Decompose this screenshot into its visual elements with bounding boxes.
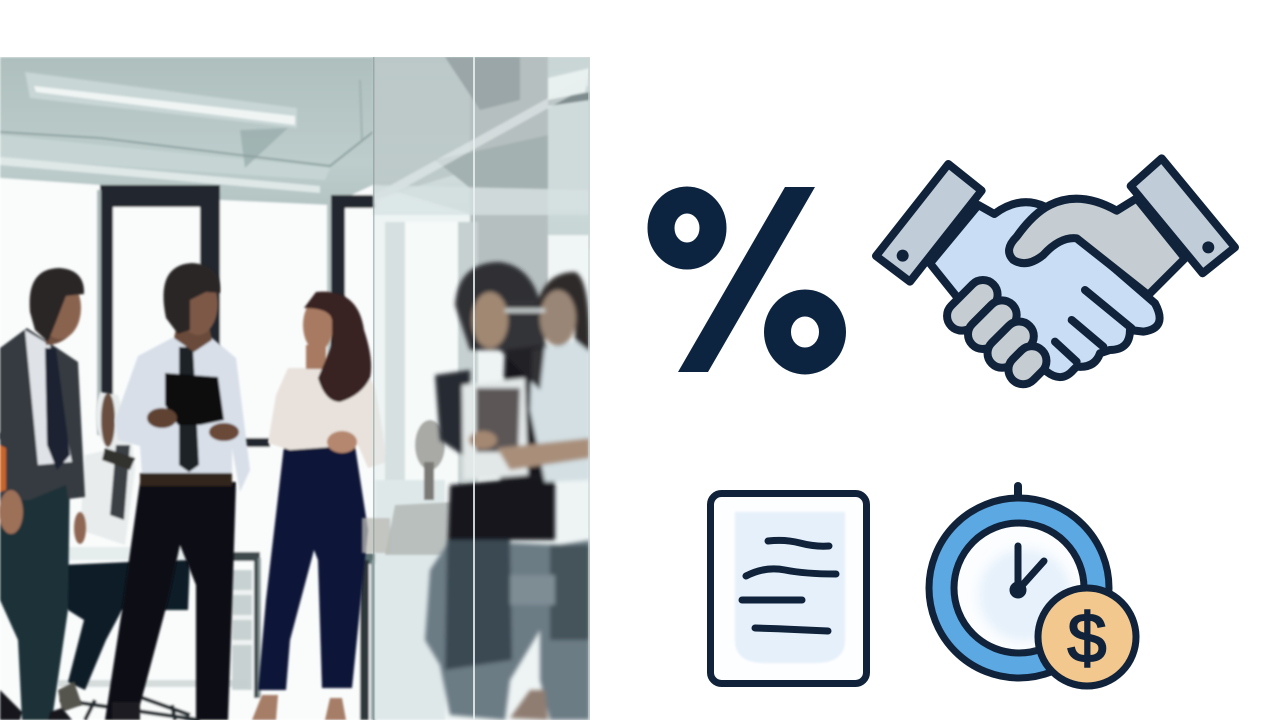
right cuff xyxy=(1131,158,1235,273)
light blue hand xyxy=(930,202,1160,377)
clock hands xyxy=(1013,546,1044,595)
icon: clock with dollar coin xyxy=(929,486,1136,686)
grey fingers xyxy=(941,274,1053,390)
office background xyxy=(0,57,590,720)
glass partition reflection xyxy=(362,57,590,720)
person: man with tablet xyxy=(105,263,250,720)
reflected women xyxy=(425,262,590,720)
person: woman in blouse xyxy=(252,292,388,720)
grey hand xyxy=(1009,198,1185,295)
left cuff xyxy=(876,164,982,282)
dollar sign: $ xyxy=(1068,599,1106,677)
cuff buttons xyxy=(897,241,1214,262)
clock ring xyxy=(929,498,1109,678)
document tint xyxy=(735,512,845,663)
icon: handshake xyxy=(876,158,1235,390)
window frames xyxy=(0,185,376,447)
icon: document xyxy=(710,494,866,684)
seated colleague behind xyxy=(58,392,190,712)
panel: office team photo xyxy=(0,57,590,720)
dollar coin xyxy=(1038,588,1136,686)
document text lines xyxy=(742,540,836,631)
glass edge highlights xyxy=(373,57,590,720)
icon: percent sign xyxy=(661,187,832,372)
clock face xyxy=(954,523,1084,653)
finger lines xyxy=(1055,290,1132,362)
back table xyxy=(68,547,190,560)
clock stem xyxy=(1014,486,1022,498)
person: man in grey suit xyxy=(0,268,86,720)
